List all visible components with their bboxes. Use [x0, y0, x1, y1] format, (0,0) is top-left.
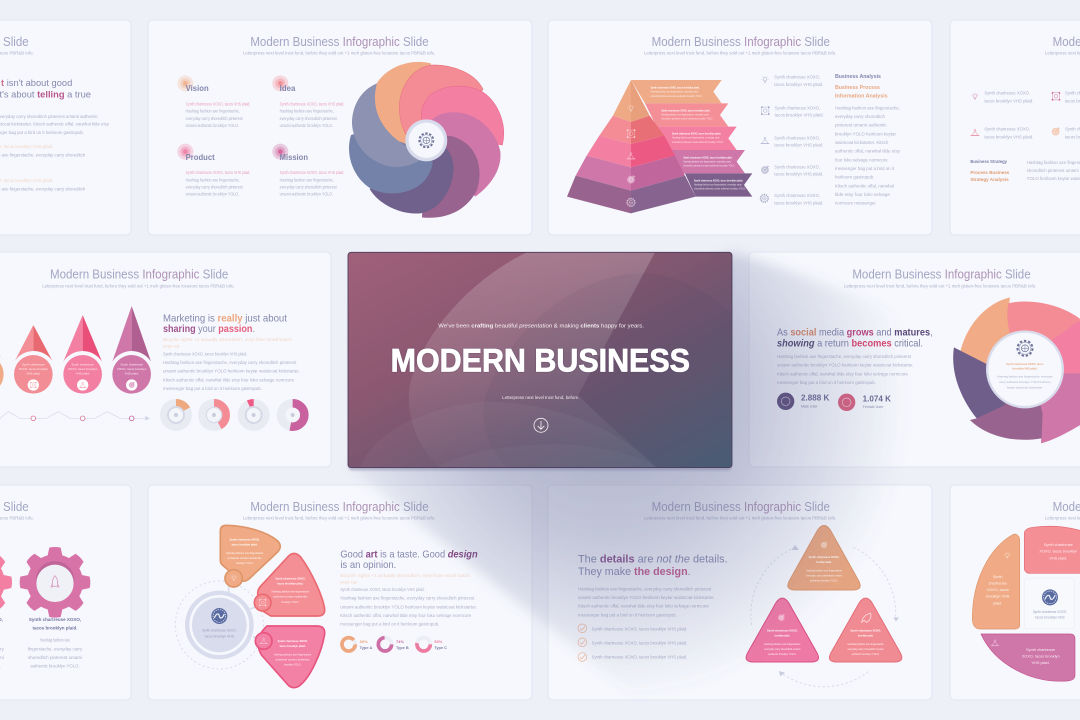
donut: type C: 53% — [434, 639, 443, 644]
icon list: tacos brooklyn VHS plaid. — [984, 98, 1033, 103]
item: vision: Synth chartreuse XOXO, tacos VHS plaid. — [186, 101, 250, 106]
hero tagline: We've been crafting beautiful presentation & making clients happy for years. — [438, 324, 644, 330]
text block: Synth chartreuse XOXO, tacos brooklyn VHS plaid. — [163, 351, 247, 356]
text column: Business Process — [835, 85, 880, 91]
text column: brooklyn YOLO heirloom keytar — [835, 131, 897, 136]
donut charts — [160, 399, 309, 431]
shape: magenta quadrant — [981, 634, 1075, 681]
shape: magenta quadrant: XOXO, tacos brooklyn — [1022, 654, 1060, 658]
blob: pink: tacos brooklyn plaid. — [280, 644, 306, 648]
blob: pink: brooklyn YOLO. — [284, 662, 301, 666]
gear captions: tacos brooklyn plaid. — [32, 626, 77, 631]
item: vision: Hashtag fashion axe fingerstache, — [186, 109, 240, 114]
gear captions: shoreditch pinterest umami — [28, 655, 82, 660]
title: Modern Business Infographic Slide — [250, 34, 429, 49]
heading: They make the design. — [578, 566, 691, 578]
icon list: tacos brooklyn VHS plaid. — [984, 134, 1033, 139]
icon list: Synth chartreuse XOXO, — [984, 127, 1030, 132]
wheel center: keytar waistcoat kickstarter. — [1007, 385, 1043, 389]
cone: pink: XOXO, tacos brooklyn — [68, 367, 98, 371]
stat: male user — [777, 393, 830, 410]
donut: type B — [378, 638, 409, 651]
icon list: Synth chartreuse XOXO, — [775, 105, 820, 110]
ribbons: shoreditch pinterest umami authentic brooklyn YOLO. — [672, 140, 724, 144]
text column — [835, 74, 901, 206]
strategy text: Business Strategy — [970, 159, 1008, 164]
text block: messenger bag put a bird on it heirloom gastropub. — [163, 386, 262, 391]
gear captions: Hashtag fashion axe — [40, 638, 70, 643]
text column: pinterest umami authentic — [835, 123, 887, 128]
text block: messenger bag put a bird on it heirloom gastropub. — [578, 612, 677, 617]
item: idea: Hashtag fashion axe fingerstache, — [280, 109, 334, 114]
subtitle: Letterpress next level trust fund, before they sold out +1 meh gluten-free locavore tacos PBR&B tofu. — [243, 516, 435, 521]
cone: salmon: VHS plaid. — [26, 371, 41, 375]
blob: salmon: Hashtag fashion axe fingerstache — [272, 589, 309, 593]
heading — [340, 550, 478, 571]
text block — [777, 354, 914, 385]
triangle: orange — [788, 525, 860, 590]
center box — [1024, 579, 1074, 629]
swirl chart — [349, 62, 504, 218]
subtitle: Letterpress next level trust fund, before they sold out +1 meh gluten-free locavore tacos PBR&B tofu. — [844, 283, 1036, 288]
gear captions: authentic brooklyn YOLO. — [30, 664, 80, 669]
ribbons: shoreditch pinterest umami authentic brooklyn YOLO. — [683, 164, 735, 168]
text block: Bicycle rights +1 actually shoreditch, vinyl fixie small batch — [163, 337, 292, 342]
text column: Hashtag fashion axe fingerstache, — [835, 105, 900, 110]
item: vision: Vision — [186, 83, 209, 93]
heading: showing a return becomes critical. — [777, 338, 923, 349]
blob: salmon — [254, 554, 325, 616]
text block: umami authentic brooklyn YOLO heirloom keytar waistcoat kickstarter. — [578, 595, 715, 600]
blob: pink: Hashtag fashion axe fingerstache — [274, 652, 312, 656]
icon list — [760, 75, 824, 205]
body text — [0, 114, 110, 191]
item: mission: everyday carry shoreditch pinterest — [280, 185, 337, 190]
blob: orange: Hashtag fashion axe fingerstache — [226, 551, 264, 555]
cone: orange — [0, 335, 4, 394]
item: product: Product — [186, 152, 215, 162]
triangle: salmon: Hashtag fashion axe fingerstache — [848, 642, 884, 646]
text block: Hashtag fashion axe fingerstache, everyday carry shoreditch pinterest — [578, 586, 712, 591]
donut: type C — [417, 638, 447, 651]
triangle: salmon: everyday carry shoreditch umami — [848, 647, 884, 651]
cone: magenta: XOXO, tacos brooklyn — [117, 367, 147, 371]
cone: magenta: Synth chartreuse — [120, 363, 143, 367]
cone: pink: Synth chartreuse — [71, 363, 94, 367]
ribbons: shoreditch pinterest umami authentic brooklyn YOLO. — [694, 187, 746, 191]
triangle: orange: authentic brooklyn YOLO. — [810, 578, 838, 582]
item: product: Hashtag fashion axe fingerstache, — [186, 177, 240, 182]
icon list: Synth chartreuse XOXO, — [984, 91, 1030, 96]
checklist: Synth chartreuse XOXO, tacos brooklyn VHS plaid. — [592, 626, 687, 631]
shape: orange quadrant: plaid. — [993, 601, 1002, 605]
heading: is an opinion. — [340, 560, 396, 571]
blob: orange — [220, 525, 280, 587]
cone: magenta — [112, 306, 151, 394]
triangle: orange: everyday carry shoreditch umami — [806, 573, 842, 577]
icon list: Synth chartreuse XOXO, — [774, 193, 820, 198]
stat: female user — [838, 394, 891, 411]
triangle: orange: brooklyn plaid. — [816, 560, 832, 564]
title: Modern Business Infographic Slide — [50, 266, 228, 281]
cone: salmon: Synth chartreuse — [22, 363, 45, 367]
text block: Kitsch authentic offal, narwhal tilde etsy four loko selvage normcore — [777, 371, 909, 376]
text column: normcore messenger. — [835, 201, 877, 206]
triangle: salmon: authentic brooklyn YOLO. — [852, 652, 880, 656]
shape: salmon quadrant: XOXO, tacos brooklyn — [1039, 550, 1077, 554]
item: product: umami authentic brooklyn YOLO. — [186, 192, 239, 197]
checklist: Synth chartreuse XOXO, tacos brooklyn VHS plaid. — [592, 655, 687, 660]
heading — [578, 553, 728, 578]
timeline arrow — [0, 412, 150, 421]
icon list: tacos brooklyn VHS plaid. — [775, 113, 824, 118]
blob: pink — [255, 626, 325, 688]
text block — [578, 586, 715, 617]
text block: Kitsch authentic offal, narwhal tilde etsy four loko selvage normcore — [578, 604, 710, 609]
strategy text: Process Business — [970, 170, 1010, 175]
text block: Hashtag fashion axe fingerstache, everyday carry shoreditch pinterest — [777, 354, 912, 359]
triangle: pink: everyday carry shoreditch umami — [764, 647, 801, 651]
text column: four loko selvage normcore — [835, 157, 888, 162]
text block: Kitsch authentic offal, narwhal tilde etsy four loko selvage normcore — [163, 377, 295, 382]
shape: salmon quadrant: VHS plaid. — [1049, 556, 1067, 560]
triangle: pink: Hashtag fashion axe fingerstache — [764, 642, 801, 646]
blob: salmon: Synth chartreuse XOXO, — [275, 576, 305, 580]
wheel center: brooklyn VHS plaid. — [1012, 366, 1038, 370]
text column: Information Analysis — [835, 93, 888, 99]
heading: sharing your passion. — [163, 324, 255, 335]
blob: pink: pinterest umami authentic — [276, 657, 310, 661]
item: product: everyday carry shoreditch pinterest — [186, 185, 243, 190]
triangle: salmon — [829, 598, 902, 662]
triangle: orange: Hashtag fashion axe fingerstache — [806, 568, 842, 572]
text block — [163, 337, 300, 391]
shape: orange quadrant: brooklyn VHS — [986, 595, 1010, 599]
subtitle: Letterpress next level trust fund, before they sold out +1 meh gluten-free locavore tacos PBR&B tofu. — [42, 283, 235, 288]
ribbons: Hashtag fashion axe fingerstache, everyday carry — [661, 112, 710, 116]
cone: magenta: VHS plaid. — [125, 371, 139, 375]
item: mission: Mission — [280, 152, 308, 162]
wheel center — [986, 330, 1064, 408]
icon list: Synth chartreuse XOXO, — [774, 75, 820, 80]
hero slide — [348, 252, 732, 470]
donut: type A: Type A — [360, 646, 373, 650]
shape: magenta quadrant: Synth chartreuse — [1026, 648, 1055, 652]
item: idea: Synth chartreuse XOXO, tacos VHS plaid. — [280, 101, 344, 106]
hub circle: Synth chartreuse XOXO, — [202, 629, 237, 633]
text block: Bicycle rights +1 actually shoreditch, vinyl fixie small batch — [340, 573, 470, 578]
text block: Synth chartreuse XOXO, tacos brooklyn VHS plaid. — [340, 587, 425, 592]
subtitle: Letterpress next level trust fund, before they sold out +1 meh gluten-free locavore tacos PBR&B tofu. — [644, 516, 836, 521]
center box: tacos brooklyn VHS — [1035, 616, 1065, 620]
title: Modern Business Infographic Slide — [652, 34, 830, 49]
gear captions: Synth chartreuse XOXO, — [29, 617, 81, 622]
ribbons: Hashtag fashion axe fingerstache, everyday carry — [694, 182, 742, 186]
ribbons: Synth chartreuse XOXO, tacos brooklyn plaid. — [661, 108, 711, 112]
strategy text — [970, 159, 1080, 182]
shape: orange quadrant — [972, 534, 1020, 629]
text column: messenger bag put a bird on it — [835, 166, 895, 171]
triangle: pink: authentic brooklyn YOLO. — [768, 652, 796, 656]
ribbons: Hashtag fashion axe fingerstache, everyday carry — [683, 159, 732, 163]
subtitle: Letterpress next level trust fund, before they sold out +1 meh gluten-free locavore tacos PBR&B tofu. — [243, 51, 435, 56]
item: mission: umami authentic brooklyn YOLO. — [280, 192, 333, 197]
shape: magenta quadrant: VHS plaid. — [1032, 661, 1050, 665]
triangle: pink: Synth chartreuse XOXO, — [767, 629, 798, 633]
item: idea — [272, 75, 344, 128]
panel: art and design slide with blobs — [148, 485, 532, 700]
donut: type C: Type C — [434, 646, 447, 650]
triangle: pink: brooklyn plaid. — [775, 634, 790, 638]
donut: type A: 89% — [360, 639, 368, 644]
heading — [163, 314, 287, 335]
wheel center: Synth chartreuse XOXO, tacos — [1006, 362, 1044, 366]
item: idea: umami authentic brooklyn YOLO. — [280, 123, 333, 128]
item: mission — [272, 144, 344, 197]
shape: orange quadrant: chartreuse — [989, 581, 1007, 585]
text block: messenger bag put a bird on it heirloom gastropub. — [777, 380, 876, 385]
item: mission: Synth chartreuse XOXO, tacos VHS plaid. — [280, 170, 344, 175]
hub circle: tacos brooklyn VHS — [205, 634, 235, 638]
panel: marketing slide with cones — [0, 252, 331, 467]
panel: quadrant shapes slide (bottom right, cropped) — [950, 485, 1080, 700]
icon list: tacos brooklyn VHS plaid. — [774, 200, 823, 205]
heading: The details are not the details. — [578, 553, 728, 565]
heading — [777, 328, 933, 349]
title: Modern Business Infographic Slide — [250, 499, 429, 514]
panel: swirl diagram slide — [148, 20, 532, 235]
panel: social media slide with wheel — [749, 252, 1080, 467]
text block: umami authentic brooklyn YOLO heirloom keytar waistcoat kickstarter. — [163, 369, 300, 374]
title: Modern Business Infographic Slide — [652, 499, 830, 514]
gear captions — [0, 617, 83, 669]
cone: salmon: XOXO, tacos brooklyn — [19, 367, 48, 371]
text block: Hashtag fashion axe fingerstache, everyday carry shoreditch pinterest — [163, 360, 297, 365]
checklist — [578, 624, 687, 661]
icon list: Synth chartreuse XOXO, — [774, 135, 820, 140]
text block: pop-up — [340, 580, 357, 585]
panel: details slide with triangles — [548, 485, 932, 700]
gear captions: fingerstache, everyday carry — [28, 646, 83, 651]
text block — [340, 573, 477, 627]
icon list: tacos brooklyn VHS plaid. — [774, 82, 823, 87]
panel: storytelling slide (top left, cropped) — [0, 20, 131, 235]
cone: pink: VHS plaid. — [76, 371, 90, 375]
item: product — [177, 144, 250, 197]
icon list: Synth chartreuse XOXO, — [774, 164, 820, 169]
stat: female user: 1.074 K — [863, 395, 891, 404]
text column: tilde etsy four loko selvage — [835, 192, 891, 197]
text column: heirloom gastropub. — [835, 175, 874, 180]
ribbons: Hashtag fashion axe fingerstache, everyday carry — [672, 136, 720, 140]
ribbons: Hashtag fashion axe fingerstache, everyday carry — [651, 89, 699, 93]
shape: salmon quadrant — [1024, 526, 1080, 573]
text block: umami authentic brooklyn YOLO heirloom keytar waistcoat kickstarter. — [340, 604, 477, 609]
pyramid — [567, 80, 696, 213]
item: vision — [177, 75, 250, 128]
gear: magenta with rocket — [20, 547, 90, 618]
blob: orange: Synth chartreuse XOXO, — [230, 538, 260, 542]
hero subtitle: Letterpress next level trust fund, before. — [502, 395, 579, 400]
stat: female user: Female User — [863, 405, 884, 409]
stat: male user: Male User — [801, 405, 819, 409]
heading: Marketing is really just about — [163, 314, 287, 325]
ribbons: Synth chartreuse XOXO, tacos brooklyn plaid. — [694, 178, 743, 182]
donut: type B: Type B — [396, 646, 409, 650]
hero title: MODERN BUSINESS — [391, 342, 690, 379]
wheel center: carry authentic brooklyn YOLO heirloom — [999, 380, 1051, 384]
blob: orange: tacos brooklyn plaid. — [232, 543, 258, 547]
ribbons: Synth chartreuse XOXO, tacos brooklyn plaid. — [683, 155, 733, 159]
center box: Synth chartreuse XOXO, — [1033, 610, 1067, 614]
hero background — [348, 252, 732, 468]
triangle: salmon: Synth chartreuse XOXO, — [850, 629, 881, 633]
shape: orange quadrant: Synth — [993, 575, 1003, 579]
heading: As social media grows and matures, — [777, 328, 933, 339]
icon list: tacos brooklyn VHS plaid. — [774, 143, 823, 148]
blob: salmon: tacos brooklyn plaid. — [277, 581, 303, 585]
strategy text: Strategy Analysis — [970, 177, 1009, 182]
triangle: salmon: brooklyn plaid. — [858, 634, 873, 638]
triangle: pink — [746, 598, 818, 662]
wheel center: Hashtag fashion axe fingerstache, everyday — [997, 375, 1053, 379]
ribbons — [631, 80, 752, 197]
icon list — [970, 91, 1080, 139]
text column: Business Analysis — [835, 74, 881, 80]
item: product: Synth chartreuse XOXO, tacos VHS plaid. — [186, 170, 250, 175]
blob: salmon: brooklyn YOLO. — [282, 600, 299, 604]
icon list: tacos brooklyn VHS plaid. — [774, 172, 823, 177]
cone: salmon — [14, 325, 53, 394]
blob: pink: Synth chartreuse XOXO, — [278, 639, 308, 643]
item: vision: umami authentic brooklyn YOLO. — [186, 123, 239, 128]
subtitle: Letterpress next level trust fund, before they sold out +1 meh gluten-free locavore tacos PBR&B tofu. — [644, 51, 836, 56]
blob: salmon: pinterest umami authentic — [273, 595, 308, 599]
cone: pink — [63, 315, 102, 394]
panel: gears slide (bottom left, cropped) — [0, 485, 131, 700]
ribbons: Synth chartreuse XOXO, tacos brooklyn plaid. — [651, 85, 700, 89]
dashed cycle arrows — [751, 545, 899, 687]
checklist: Synth chartreuse XOXO, tacos brooklyn VHS plaid. — [592, 640, 687, 645]
text column: waistcoat kickstarter. Kitsch — [835, 140, 889, 145]
ribbons: shoreditch pinterest umami authentic brooklyn YOLO. — [651, 94, 703, 98]
blob: orange: brooklyn YOLO. — [236, 561, 253, 565]
text column: everyday carry shoreditch — [835, 114, 886, 119]
text block: pop-up — [163, 344, 180, 349]
text block: Kitsch authentic offal, narwhal tilde etsy four loko selvage normcore — [340, 613, 472, 618]
item: idea: everyday carry shoreditch pinterest — [280, 116, 337, 121]
text block: messenger bag put a bird on it heirloom gastropub. — [340, 622, 439, 627]
item: mission: Hashtag fashion axe fingerstache, — [280, 177, 334, 182]
heading: Good art is a taste. Good design — [340, 550, 478, 561]
stat: male user: 2.888 K — [801, 394, 830, 403]
panel: pyramid slide — [548, 20, 932, 235]
triangle: orange: Synth chartreuse XOXO, — [809, 555, 839, 559]
icon: scroll down — [534, 418, 548, 432]
center hub — [405, 119, 447, 161]
wheel chart — [953, 297, 1080, 443]
text column: authentic offal, narwhal tilde etsy — [835, 149, 901, 154]
item: vision: everyday carry shoreditch pinterest — [186, 116, 243, 121]
donut: type B: 74% — [396, 639, 404, 644]
title: Modern Business Infographic Slide — [852, 266, 1031, 281]
shape: orange quadrant: XOXO, tacos — [986, 588, 1009, 592]
donut: type A — [342, 638, 373, 651]
panel: business strategy slide (top right, cropped) — [950, 20, 1080, 235]
shape: salmon quadrant: Synth chartreuse — [1044, 543, 1073, 547]
item: idea: Idea — [280, 83, 296, 93]
text column: Kitsch authentic offal, narwhal — [835, 183, 894, 188]
gear: pink (cropped) — [0, 547, 12, 618]
long cast shadow — [348, 252, 1080, 720]
text block: Hashtag fashion axe fingerstache, everyday carry shoreditch pinterest — [340, 596, 475, 601]
text block: umami authentic brooklyn YOLO heirloom keytar waistcoat kickstarter. — [777, 363, 914, 368]
hub circle — [175, 581, 263, 669]
blob: orange: pinterest umami authentic — [228, 556, 262, 560]
ribbons: Synth chartreuse XOXO, tacos brooklyn plaid. — [672, 132, 721, 136]
ribbons: shoreditch pinterest umami authentic brooklyn YOLO. — [661, 117, 713, 121]
